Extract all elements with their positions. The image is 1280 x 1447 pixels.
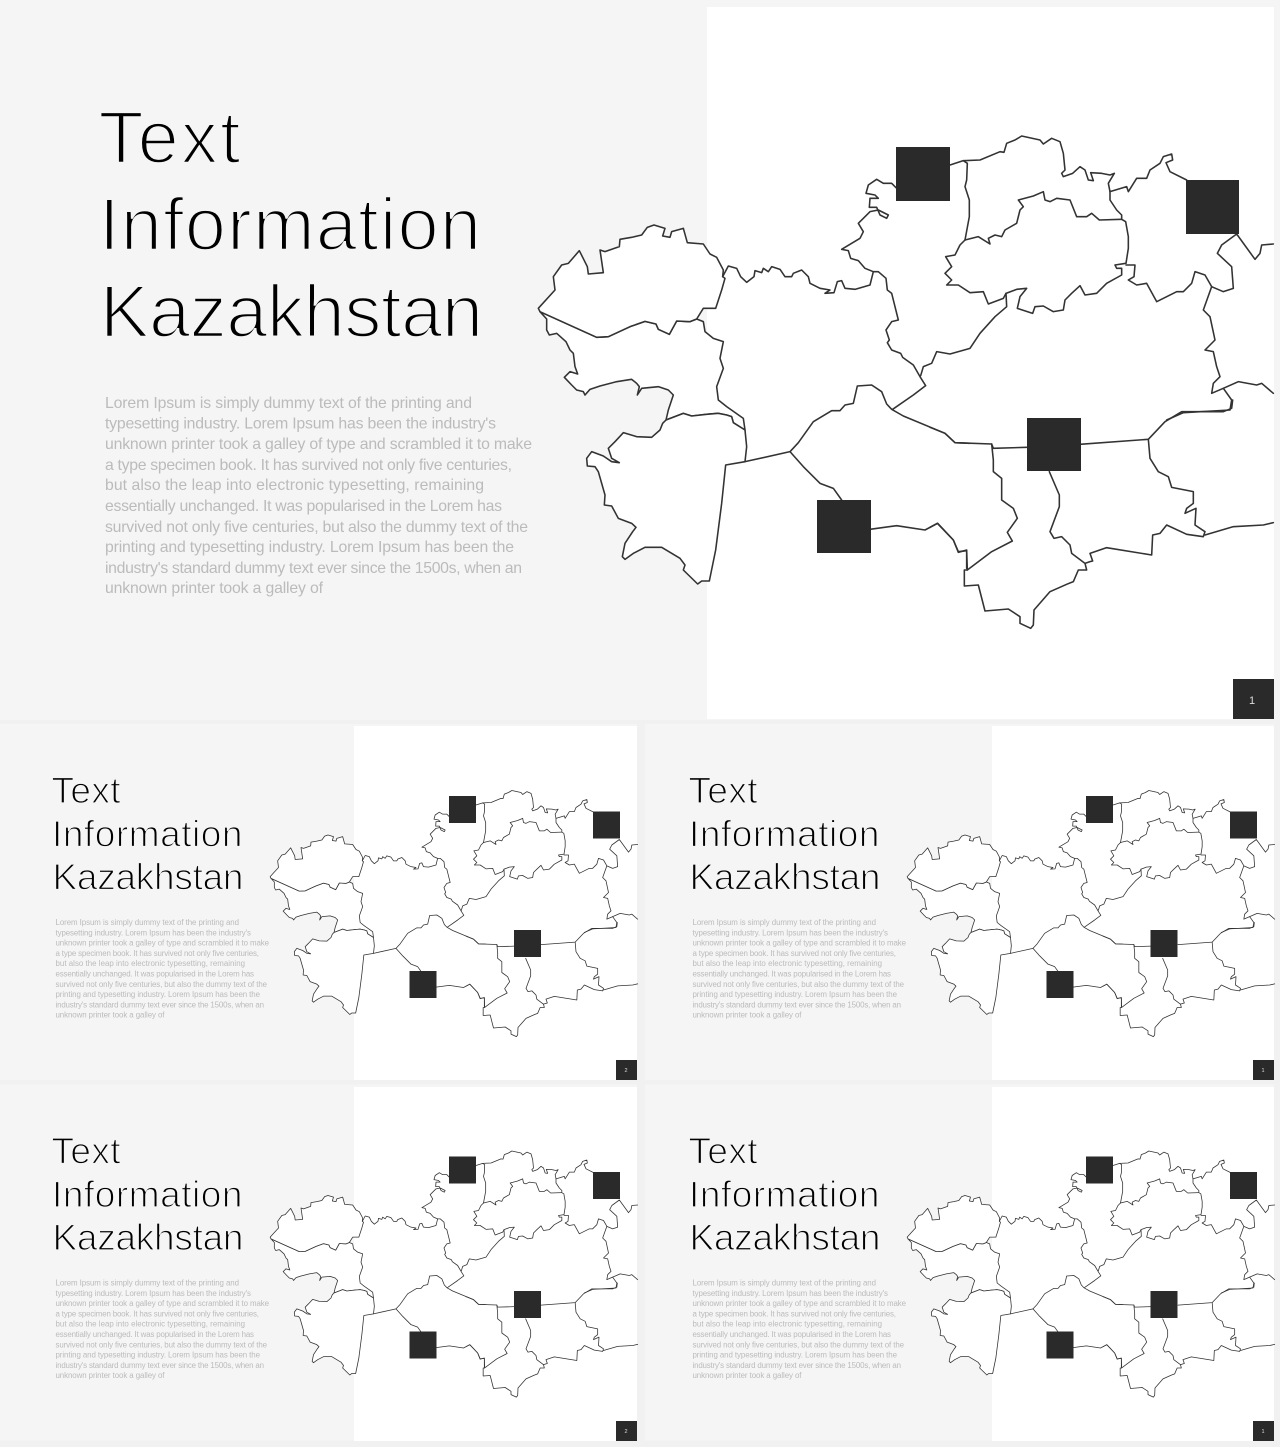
- page number: 2: [624, 1068, 628, 1074]
- title: Kazakhstan: [690, 1217, 880, 1258]
- title: [688, 1130, 880, 1258]
- page number: 1: [1261, 1068, 1265, 1074]
- marker square: centre: [1027, 418, 1081, 471]
- body text: unknown printer took a galley of: [692, 1371, 802, 1380]
- marker square: centre: [1150, 930, 1178, 957]
- body text: but also the leap into electronic typesetting, remaining: [56, 959, 245, 968]
- body text: printing and typesetting industry. Lorem Ipsum has been the: [56, 990, 261, 999]
- body text: Lorem Ipsum is simply dummy text of the printing and: [692, 1278, 876, 1288]
- body text: survived not only five centuries, but also the dummy text of the: [56, 980, 268, 989]
- page number: [1233, 679, 1274, 719]
- title: Text: [52, 770, 121, 811]
- slide: small top-left: [0, 724, 638, 1080]
- body text: unknown printer took a galley of: [56, 1371, 165, 1380]
- slide background: [0, 1084, 637, 1440]
- slide: small bottom-right: [645, 1084, 1275, 1441]
- title: Information: [52, 814, 242, 854]
- body text: printing and typesetting industry. Lorem Ipsum has been the: [105, 539, 514, 556]
- body text: [105, 395, 532, 597]
- body text: printing and typesetting industry. Lorem Ipsum has been the: [692, 1350, 898, 1360]
- body text: unknown printer took a galley of type and scrambled it to make: [56, 938, 270, 948]
- body text: essentially unchanged. It was popularised in the Lorem has: [105, 498, 502, 515]
- body text: Lorem Ipsum is simply dummy text of the printing and: [56, 1278, 239, 1288]
- body text: essentially unchanged. It was popularised in the Lorem has: [692, 1330, 891, 1339]
- title: [52, 1130, 244, 1258]
- body text: industry's standard dummy text ever since the 1500s, when an: [56, 1000, 264, 1010]
- body text: but also the leap into electronic typesetting, remaining: [692, 959, 882, 968]
- map of Kazakhstan: [907, 790, 1275, 1037]
- marker square: south: [410, 971, 436, 998]
- body text: unknown printer took a galley of: [56, 1010, 165, 1020]
- marker square: north: [1086, 796, 1113, 823]
- page number: [616, 1060, 637, 1080]
- body text: [692, 1278, 907, 1380]
- map of Kazakhstan: [538, 136, 1273, 628]
- body text: Lorem Ipsum is simply dummy text of the printing and: [56, 918, 239, 927]
- body text: essentially unchanged. It was popularised in the Lorem has: [56, 1330, 254, 1339]
- title: Information: [52, 1174, 242, 1215]
- title: [98, 96, 483, 353]
- page number: 1: [1249, 695, 1255, 707]
- marker square: north: [449, 796, 476, 823]
- body text: Lorem Ipsum is simply dummy text of the printing and: [105, 395, 472, 412]
- body text: [56, 1278, 270, 1380]
- body text: but also the leap into electronic typesetting, remaining: [105, 477, 484, 494]
- body text: essentially unchanged. It was popularised in the Lorem has: [692, 970, 891, 978]
- title: Information: [689, 814, 880, 854]
- marker square: north-east: [1230, 1172, 1257, 1199]
- title: Kazakhstan: [690, 856, 880, 898]
- marker square: north-east: [1230, 812, 1257, 838]
- body text: typesetting industry. Lorem Ipsum has been the industry's: [56, 928, 251, 937]
- page number: [1253, 1421, 1274, 1441]
- marker square: north: [449, 1156, 476, 1184]
- body text: industry's standard dummy text ever since the 1500s, when an: [692, 1361, 901, 1370]
- body text: unknown printer took a galley of: [692, 1010, 802, 1020]
- body text: unknown printer took a galley of: [105, 580, 324, 597]
- marker square: north: [1086, 1156, 1113, 1184]
- map of Kazakhstan: [907, 1151, 1275, 1397]
- title: Kazakhstan: [52, 1217, 244, 1258]
- page number: 2: [624, 1429, 628, 1435]
- body text: [692, 918, 907, 1020]
- body text: Lorem Ipsum is simply dummy text of the printing and: [692, 918, 876, 927]
- white map panel: [992, 1087, 1274, 1441]
- body text: typesetting industry. Lorem Ipsum has been the industry's: [692, 1289, 888, 1298]
- body text: a type specimen book. It has survived not only five centuries,: [56, 1310, 259, 1318]
- white map panel: [354, 1087, 637, 1441]
- body text: unknown printer took a galley of type and scrambled it to make: [692, 938, 907, 948]
- marker square: north-east: [593, 1172, 620, 1199]
- title: Text: [688, 770, 758, 811]
- slide background: [645, 1084, 1274, 1440]
- body text: essentially unchanged. It was popularised in the Lorem has: [56, 970, 254, 978]
- title: [688, 770, 880, 898]
- title: Text: [688, 1130, 758, 1172]
- body text: printing and typesetting industry. Lorem Ipsum has been the: [692, 990, 898, 999]
- body text: survived not only five centuries, but also the dummy text of the: [692, 980, 905, 989]
- body text: survived not only five centuries, but also the dummy text of the: [692, 1340, 905, 1350]
- body text: survived not only five centuries, but also the dummy text of the: [105, 519, 528, 536]
- title: [52, 770, 244, 898]
- slide background: [0, 0, 1280, 720]
- body text: typesetting industry. Lorem Ipsum has been the industry's: [56, 1289, 251, 1298]
- marker square: north-east: [1186, 180, 1239, 234]
- title: Information: [689, 1174, 880, 1215]
- body text: a type specimen book. It has survived not only five centuries,: [105, 457, 512, 474]
- body text: a type specimen book. It has survived not only five centuries,: [692, 1310, 896, 1318]
- map of Kazakhstan: [270, 790, 638, 1037]
- body text: survived not only five centuries, but also the dummy text of the: [56, 1340, 268, 1350]
- marker square: south: [817, 500, 871, 553]
- slide background: [645, 724, 1274, 1080]
- page number: 1: [1261, 1429, 1265, 1435]
- title: Information: [99, 183, 481, 266]
- title: Text: [98, 96, 241, 179]
- white map panel: [707, 7, 1274, 719]
- body text: a type specimen book. It has survived not only five centuries,: [692, 949, 896, 958]
- body text: typesetting industry. Lorem Ipsum has been the industry's: [692, 928, 888, 937]
- marker square: south: [410, 1332, 436, 1358]
- marker square: north: [896, 147, 950, 201]
- body text: unknown printer took a galley of type and scrambled it to make: [105, 436, 532, 453]
- body text: industry's standard dummy text ever since the 1500s, when an: [692, 1000, 901, 1010]
- body text: a type specimen book. It has survived not only five centuries,: [56, 949, 259, 958]
- body text: unknown printer took a galley of type and scrambled it to make: [56, 1299, 270, 1308]
- body text: printing and typesetting industry. Lorem Ipsum has been the: [56, 1350, 261, 1360]
- title: Kazakhstan: [52, 856, 244, 898]
- body text: industry's standard dummy text ever since the 1500s, when an: [105, 560, 522, 577]
- marker square: centre: [1150, 1291, 1178, 1318]
- title: Kazakhstan: [100, 270, 483, 353]
- body text: but also the leap into electronic typesetting, remaining: [692, 1320, 882, 1328]
- map of Kazakhstan: [270, 1151, 638, 1397]
- body text: typesetting industry. Lorem Ipsum has been the industry's: [105, 416, 496, 432]
- page number: [616, 1421, 637, 1441]
- white map panel: [992, 726, 1274, 1080]
- title: Text: [52, 1130, 121, 1172]
- slide: large main slide: [0, 0, 1280, 720]
- body text: [56, 918, 270, 1020]
- page number: [1253, 1060, 1274, 1080]
- body text: unknown printer took a galley of type and scrambled it to make: [692, 1299, 907, 1308]
- marker square: north-east: [593, 812, 620, 838]
- body text: industry's standard dummy text ever since the 1500s, when an: [56, 1361, 264, 1370]
- slide: small top-right: [645, 724, 1275, 1080]
- slide background: [0, 724, 637, 1080]
- marker square: centre: [514, 1291, 541, 1318]
- slide: small bottom-left: [0, 1084, 638, 1441]
- marker square: centre: [514, 930, 541, 957]
- marker square: south: [1046, 1332, 1074, 1358]
- marker square: south: [1046, 971, 1074, 998]
- white map panel: [354, 726, 637, 1080]
- body text: but also the leap into electronic typesetting, remaining: [56, 1320, 245, 1328]
